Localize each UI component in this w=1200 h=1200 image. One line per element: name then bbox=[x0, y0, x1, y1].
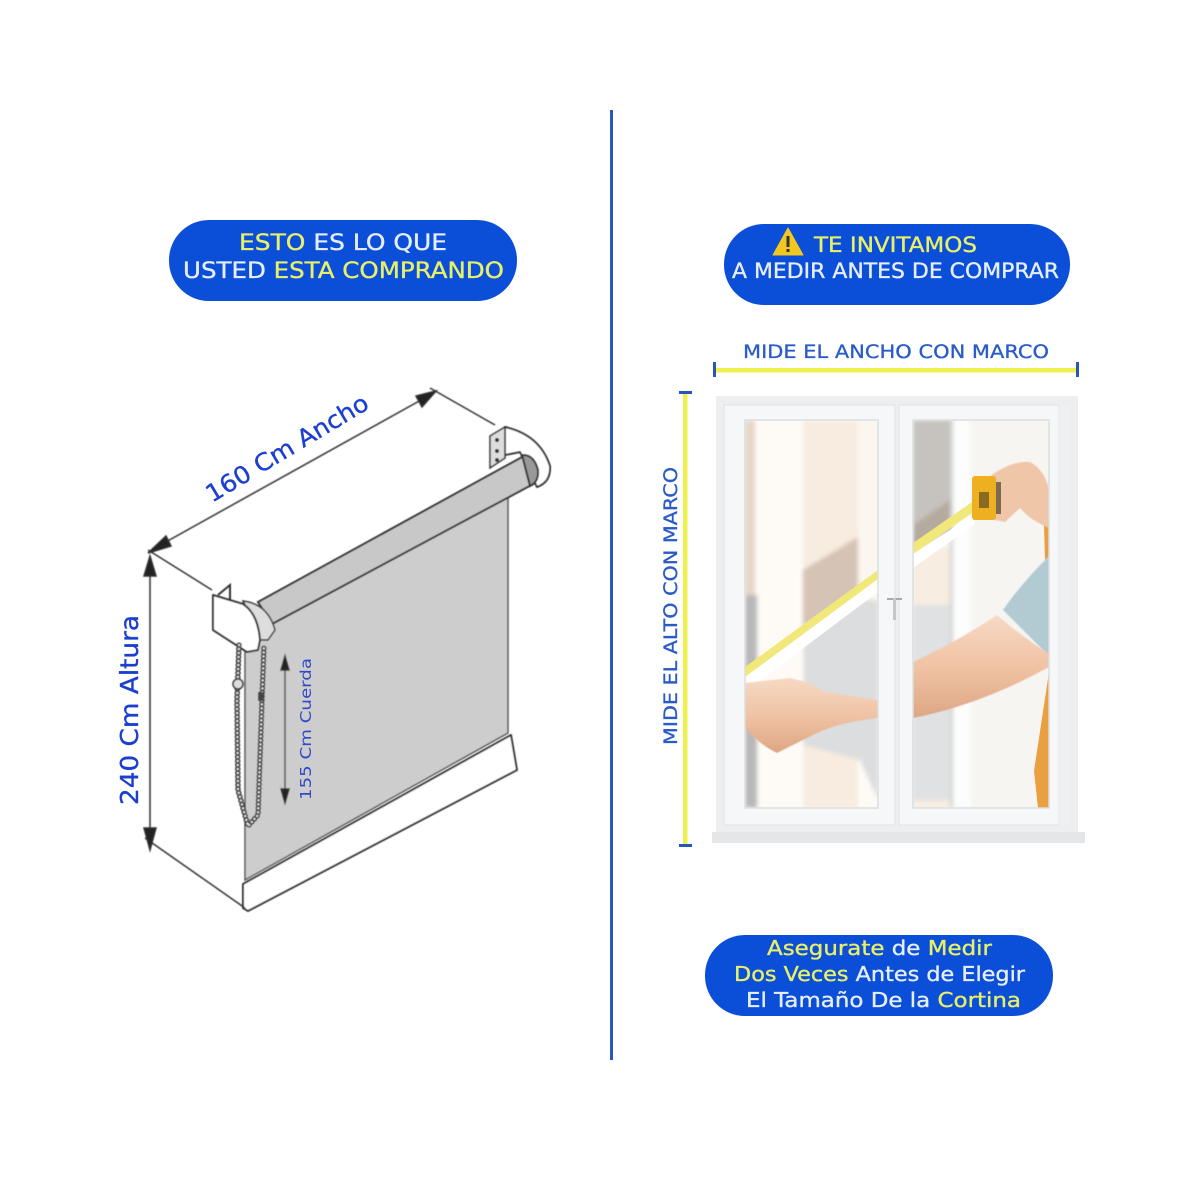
pill: te invitamos a medir: TE INVITAMOS bbox=[813, 233, 977, 257]
pill: esto es lo que usted esta comprando: ESTO ES LO QUE bbox=[239, 231, 447, 256]
pill: asegurate de medir bbox=[705, 935, 1053, 1016]
vest bbox=[1034, 672, 1049, 808]
label: 155 cm cuerda: 155 Cm Cuerda bbox=[297, 658, 315, 800]
tape left bbox=[746, 580, 877, 684]
dimension lines bbox=[144, 388, 495, 908]
bottom rail bbox=[243, 735, 517, 911]
center divider bbox=[610, 110, 613, 1060]
pill: te invitamos a medir: A MEDIR ANTES DE COMPRAR bbox=[732, 259, 1059, 283]
window photo bbox=[712, 396, 1085, 843]
arm bbox=[913, 615, 1049, 718]
width measure line bbox=[713, 362, 1079, 377]
pill: asegurate de medir: Asegurate de Medir bbox=[767, 936, 993, 960]
right pane view bbox=[913, 420, 1049, 808]
right bracket bbox=[490, 427, 550, 487]
pill: asegurate de medir: Dos Veces Antes de Elegir bbox=[734, 962, 1026, 986]
pill: asegurate de medir: El Tamaño De la Cortina bbox=[746, 988, 1021, 1012]
sash edges bbox=[745, 420, 878, 808]
tape measure body bbox=[972, 476, 1001, 520]
pill: esto es lo que usted esta comprando: USTED ESTA COMPRANDO bbox=[183, 259, 504, 284]
roller blind diagram bbox=[144, 388, 550, 911]
height measure line bbox=[679, 391, 692, 847]
tape right bbox=[913, 514, 975, 568]
chain bbox=[233, 645, 264, 826]
left pane view bbox=[745, 420, 878, 808]
hand left bbox=[745, 678, 878, 753]
label: mide el alto: MIDE EL ALTO CON MARCO bbox=[660, 467, 682, 745]
label: 160 cm ancho: 160 Cm Ancho bbox=[201, 389, 374, 508]
pill: esto es lo que usted esta comprando bbox=[169, 220, 517, 301]
icon: warning triangle bbox=[773, 228, 803, 255]
hand right bbox=[985, 462, 1049, 528]
window handle bbox=[887, 598, 902, 620]
label: 240 cm altura: 240 Cm Altura bbox=[115, 615, 144, 805]
infographic canvas bbox=[118, 110, 1085, 1060]
window frame bbox=[712, 396, 1085, 843]
pill: te invitamos a medir bbox=[724, 224, 1070, 305]
label: mide el ancho: MIDE EL ANCHO CON MARCO bbox=[743, 341, 1049, 363]
shirt bbox=[1003, 556, 1049, 656]
blind fabric bbox=[245, 497, 508, 880]
roller tube bbox=[258, 456, 537, 624]
left bracket bbox=[213, 585, 275, 652]
